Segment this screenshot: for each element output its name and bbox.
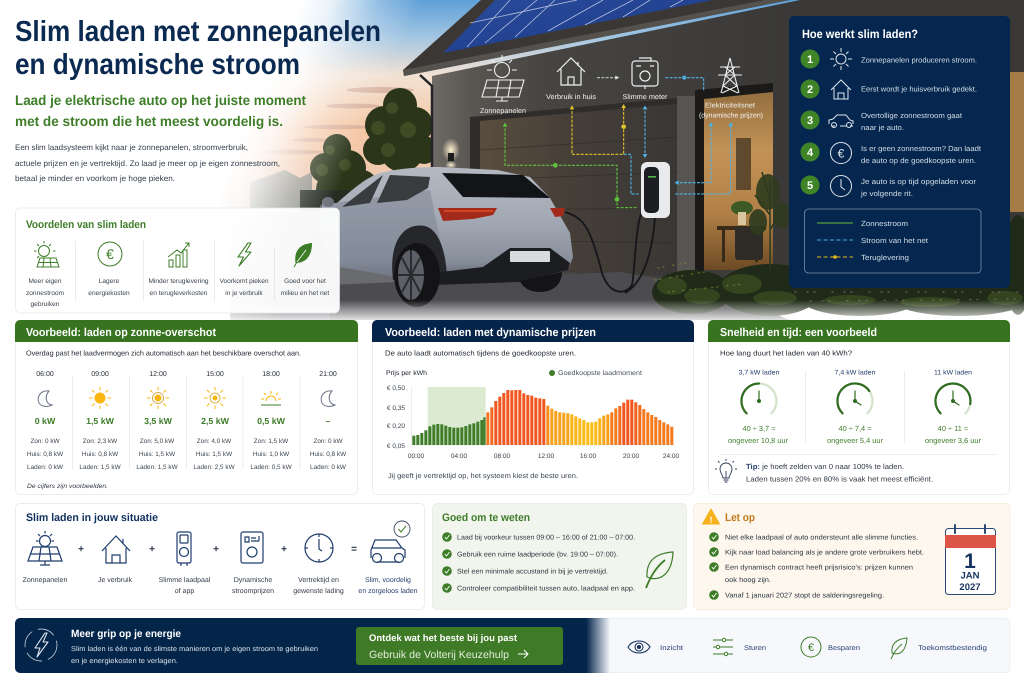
panel heading: Let op [725, 512, 755, 524]
icon: calendar 1 jan 2027 [945, 525, 996, 594]
trees [300, 88, 440, 220]
grey line from home to meter [597, 76, 619, 79]
step 5: 5 [807, 180, 813, 192]
icon: energy contract [241, 532, 263, 563]
step 4: de auto op de goedkoopste uren. [861, 156, 976, 165]
details per time: Laden: 1,5 kW [136, 464, 179, 471]
gauge 3,7 kW: 40 ÷ 3,7 = [742, 424, 776, 433]
tree highlights [316, 102, 416, 176]
checklist: Vanaf 1 januari 2027 stopt de salderingsregeling. [725, 592, 884, 600]
icon: calendar 1 jan 2027: 2027 [959, 582, 981, 593]
details per time: Zon: 4,0 kW [197, 438, 232, 445]
icon: car with check [371, 521, 410, 562]
panel: slim laden in jouw situatie [16, 504, 424, 610]
y axis labels: € 0,50 [387, 385, 405, 392]
icon: house [102, 536, 130, 563]
legend: Stroom van het net [861, 236, 928, 245]
icon labels: Vertrektijd en [298, 576, 339, 584]
dividers [72, 376, 300, 469]
checklist: Stel een minimale accustand in bij je vertrektijd. [457, 568, 608, 576]
drainpipe [420, 75, 432, 168]
icon labels: Dynamische [234, 576, 272, 584]
icon: light bulb [715, 459, 737, 482]
details per time: Laden: 0 kW [27, 464, 64, 471]
bars [412, 387, 675, 445]
wall lamp [442, 138, 460, 169]
chart caption: Jij geeft je vertrektijd op, het systeem kiest de beste uren. [388, 472, 578, 480]
wall charger [641, 162, 670, 218]
card intro: Hoe lang duurt het laden van 40 kWh? [720, 348, 852, 358]
card header [15, 320, 358, 342]
legend: Teruglevering [861, 253, 909, 262]
charging power values [35, 416, 331, 426]
icon: sliders [713, 638, 733, 656]
checklist [442, 532, 635, 593]
card intro: De auto laadt automatisch tijdens de goedkoopste uren. [385, 348, 576, 358]
call to action button: Ontdek wat het beste bij jou past [369, 633, 518, 644]
details per time: Huis: 1,5 kW [139, 451, 176, 458]
checklist: Laad bij voorkeur tussen 09:00 – 16:00 of 21:00 – 07:00. [457, 534, 635, 542]
wheel arch [392, 225, 447, 283]
icon: rising chart [168, 243, 189, 267]
banner heading: Meer grip op je energie [71, 628, 181, 640]
gauge 11 kW: 11 kW laden [934, 370, 972, 376]
icon labels: Zonnepanelen [23, 576, 67, 584]
details per time: Huis: 0,8 kW [27, 451, 64, 458]
benefit text 2: Lagere [99, 278, 120, 285]
benefit text 2: energiekosten [88, 290, 130, 297]
icon labels: Slim, voordelig [365, 576, 411, 584]
panel background [789, 16, 1010, 288]
house wall [432, 0, 1024, 290]
panel heading: Voordelen van slim laden [26, 219, 146, 231]
tip text: Laden tussen 20% en 80% is vaak het meest efficiënt. [746, 474, 933, 484]
yellow return line [572, 105, 624, 154]
gauge 3,7 kW [728, 370, 789, 445]
details per time: Huis: 0,8 kW [82, 451, 119, 458]
step 2: Eerst wordt je huisverbruik gedekt. [861, 84, 977, 94]
bumper [433, 248, 570, 285]
card heading: Snelheid en tijd: een voorbeeld [720, 327, 877, 339]
tip text [746, 462, 933, 484]
panel: let op [694, 504, 1010, 610]
gauge 7,4 kW [827, 370, 883, 445]
icon: warning triangle: ! [710, 515, 712, 525]
benefit text 3: en terugleverkosten [150, 290, 208, 297]
shrubs [652, 172, 1024, 316]
banner text: Slim laden is één van de slimste manieren om je eigen stroom te gebruiken [71, 645, 318, 653]
details per time: Zon: 1,5 kW [254, 438, 289, 445]
step 1 [800, 48, 977, 70]
panel: hoe werkt slim laden [789, 16, 1010, 288]
car rear window [442, 173, 550, 198]
number plate [510, 251, 550, 262]
title: Slim laden met zonnepanelen [15, 16, 381, 48]
hero icon: pylon [718, 58, 742, 93]
icon: leaf [891, 638, 907, 659]
panel heading: Goed om te weten [442, 512, 530, 524]
flow markers [503, 76, 733, 202]
x axis labels: 04:00 [451, 453, 468, 460]
bottom white fade [0, 300, 1024, 324]
step 2: 2 [807, 84, 813, 96]
icon: moon 06:00 [38, 391, 52, 406]
y axis labels: € 0,35 [387, 405, 405, 412]
icon: eye [628, 641, 650, 653]
hero illustration: house, car and charger at sunset [0, 0, 1024, 325]
entrance pillar [677, 96, 696, 276]
tail lights [438, 208, 565, 221]
tip text: Tip: je hoeft zelden van 0 naar 100% te laden. [746, 462, 904, 471]
panel background [16, 504, 424, 610]
card background [708, 320, 1010, 494]
benefit text 4: Voorkomt pieken [219, 278, 269, 285]
y axis labels: € 0,20 [387, 423, 405, 430]
icon: lightning circle [25, 629, 57, 661]
step 4: € [838, 146, 845, 160]
call to action button: Gebruik de Volterij Keuzehulp [369, 649, 509, 661]
car body [320, 167, 573, 285]
operator plus: + [149, 544, 155, 555]
y axis labels: € 0,05 [387, 443, 405, 450]
icon: sunset 18:00 [261, 391, 281, 405]
time labels: 21:00 [319, 371, 337, 378]
footer banner: meer grip op je energie [15, 618, 610, 673]
icon labels: gewenste lading [293, 587, 344, 595]
details per time: Laden: 1,5 kW [79, 464, 122, 471]
rear right wheel [520, 272, 562, 292]
details per time: Huis: 0,8 kW [310, 451, 347, 458]
card: laden met dynamische prijzen [372, 320, 694, 494]
label: Sturen: Sturen [744, 645, 766, 652]
card heading: Voorbeeld: laden met dynamische prijzen [385, 327, 596, 339]
step 3: Overtollige zonnestroom gaat [861, 111, 962, 120]
benefit text 3: Minder teruglevering [148, 278, 209, 285]
solar panels [443, 0, 713, 53]
panel background [694, 504, 1010, 610]
intro text: Een slim laadsysteem kijkt naar je zonnepanelen, stroomverbruik, [15, 143, 248, 152]
card: snelheid en tijd [708, 320, 1010, 494]
car [320, 167, 573, 307]
time labels [36, 371, 337, 378]
intro text: betaal je minder en voorkom je hoge pieken. [15, 174, 175, 183]
checklist: Kijk naar load balancing als je andere grote verbruikers hebt. [725, 550, 924, 556]
icon: clock [305, 534, 333, 562]
time labels: 06:00 [36, 371, 54, 378]
icon: moon 21:00 [321, 391, 335, 406]
icon: leaf [646, 552, 673, 588]
card intro: Overdag past het laadvermogen zich automatisch aan het beschikbare overschot aan. [26, 348, 301, 358]
hero label: Elektriciteitsnet [699, 102, 763, 120]
card heading: Voorbeeld: laden op zonne-overschot [26, 327, 216, 339]
panel: goed om te weten [432, 504, 686, 610]
gutter [403, 0, 790, 76]
hero label: Zonnepanelen: Zonnepanelen [480, 107, 526, 115]
step 3: 3 [807, 115, 813, 127]
icon: leaf [294, 243, 312, 267]
benefit text 5: Goed voor het [284, 278, 326, 285]
x axis labels: 20:00 [623, 453, 640, 460]
checklist: Controleer compatibiliteit tussen auto, laadpaal en app. [457, 586, 635, 592]
benefit text 1: zonnestroom [26, 290, 65, 297]
benefit text 1: gebruiken [31, 301, 60, 308]
garage door [470, 98, 677, 276]
charging cable [565, 200, 655, 293]
gauge 7,4 kW: 40 ÷ 7,4 = [838, 424, 872, 433]
rule [720, 454, 997, 456]
icon labels: of app [175, 587, 194, 595]
hero label: Elektriciteitsnet: (dynamische prijzen) [699, 112, 763, 120]
banner text: en je energiekosten te verlagen. [71, 657, 178, 665]
label: Besparen: Besparen [828, 645, 860, 652]
benefit text 4 [219, 278, 269, 297]
x axis labels: 16:00 [580, 453, 597, 460]
icon: euro [801, 637, 821, 657]
green solar line [505, 124, 638, 208]
checklist: ook hoog zijn. [725, 577, 771, 584]
icon: euro: € [106, 246, 114, 262]
x axis labels [408, 453, 680, 460]
driveway [330, 272, 790, 320]
benefit text 5: milieu en het net [281, 290, 329, 297]
sunset clouds [263, 87, 414, 154]
blue grid lines [624, 78, 731, 194]
icon labels: Slimme laadpaal [159, 576, 211, 584]
icon labels [23, 576, 418, 595]
panel background [16, 208, 340, 313]
step 5: Je auto is op tijd opgeladen voor [861, 177, 977, 186]
subtitle [15, 92, 306, 129]
benefit text 3 [148, 278, 209, 297]
operator plus: + [281, 544, 287, 555]
time labels: 15:00 [206, 371, 224, 378]
gauge 11 kW [925, 370, 981, 445]
intro text [15, 143, 280, 183]
icon: sun and panel [34, 241, 59, 267]
step 3: naar je auto. [861, 123, 904, 132]
car side windows [342, 175, 430, 207]
panel heading: Slim laden in jouw situatie [26, 512, 158, 524]
x axis labels: 24:00 [663, 453, 680, 460]
step 4: 4 [807, 147, 814, 159]
step 1: Zonnepanelen produceren stroom. [861, 56, 977, 64]
banner background [15, 618, 610, 673]
step 2 [800, 80, 977, 99]
window with warm room [695, 83, 773, 272]
icon: sun 12:00 [147, 387, 169, 409]
axis title: Prijs per kWh [386, 370, 427, 377]
icon: lightning [238, 243, 251, 266]
gauge 7,4 kW: ongeveer 5,4 uur [827, 436, 883, 445]
chart legend: Goedkoopste laadmoment [558, 370, 642, 377]
icon: warning triangle [702, 509, 720, 525]
ground [230, 212, 440, 320]
charging power values: – [326, 416, 331, 426]
icon labels: en zorgeloos laden [358, 587, 418, 595]
benefit text 5 [281, 278, 329, 297]
step 1: 1 [807, 54, 813, 66]
x axis labels: 12:00 [538, 453, 555, 460]
details per time: Zon: 2,3 kW [83, 438, 118, 445]
intro text: actuele prijzen en je vertrektijd. Zo laad je meer op je eigen zonnestroom, [15, 159, 280, 168]
charging power values: 0,5 kW [257, 416, 286, 426]
hero label: Verbruik in huis: Verbruik in huis [546, 93, 597, 101]
main wheel [394, 243, 440, 307]
checklist [709, 532, 924, 600]
time labels: 18:00 [262, 371, 280, 378]
footnote: De cijfers zijn voorbeelden. [27, 483, 108, 490]
dividers [806, 371, 904, 443]
energy flow lines [503, 76, 733, 208]
title [15, 16, 381, 81]
details per time: Laden: 2,5 kW [193, 464, 236, 471]
y axis labels [387, 385, 405, 450]
footer strip with benefits [580, 618, 1010, 672]
card header [372, 320, 694, 342]
hero label: Elektriciteitsnet: Elektriciteitsnet [705, 102, 755, 110]
icon: sun 09:00 [89, 387, 111, 409]
details per time: Zon: 0 kW [30, 438, 61, 445]
step 3 [800, 110, 962, 132]
checklist: Een dynamisch contract heeft prijsrisico's: prijzen kunnen [725, 564, 913, 572]
charging power values: 3,5 kW [144, 416, 173, 426]
distant tree line [250, 170, 312, 210]
subtitle: met de stroom die het meest voordelig is. [15, 113, 283, 129]
icon: sun 15:00 [204, 387, 226, 409]
step 4: Is er geen zonnestroom? Dan laadt [861, 144, 981, 153]
side mirror [322, 197, 334, 207]
panel heading: Hoe werkt slim laden? [802, 27, 918, 41]
title: en dynamische stroom [15, 49, 300, 81]
sky [220, 0, 1024, 235]
gauge 11 kW: ongeveer 3,6 uur [925, 436, 981, 445]
hero icon: solar panels [482, 55, 524, 101]
step 5: je volgende rit. [860, 189, 913, 198]
car side shading [320, 190, 440, 283]
left white fade [0, 0, 420, 325]
panel background [432, 504, 686, 610]
icon: solar panel [28, 531, 62, 565]
benefit text 2 [88, 278, 130, 297]
operator plus: + [213, 544, 219, 555]
icon: charge point [177, 532, 191, 566]
icon: euro [98, 242, 122, 266]
operator plus: + [78, 544, 84, 555]
card background [372, 320, 694, 494]
details per time [27, 438, 347, 471]
subtitle: Laad je elektrische auto op het juiste moment [15, 92, 306, 108]
icon: calendar 1 jan 2027: JAN [960, 570, 980, 582]
gauge 11 kW: 40 ÷ 11 = [938, 424, 968, 433]
gauge 3,7 kW: ongeveer 10,8 uur [728, 436, 789, 445]
benefit text 4: in je verbruik [225, 290, 263, 297]
checklist: Gebruik een ruime laadperiode (bv. 19:00 – 07:00). [457, 552, 618, 558]
x axis labels: 08:00 [494, 453, 511, 460]
panel: voordelen van slim laden [16, 208, 340, 313]
label: Inzicht: Inzicht [660, 644, 683, 652]
card header [708, 320, 1010, 342]
icon labels: Je verbruik [98, 576, 133, 584]
legend [804, 209, 981, 273]
details per time: Huis: 1,0 kW [253, 451, 290, 458]
benefit text 1 [26, 278, 65, 308]
checklist: Niet elke laadpaal of auto ondersteunt alle slimme functies. [725, 534, 918, 542]
charging power values: 1,5 kW [86, 416, 115, 426]
far-right window [1010, 72, 1024, 212]
banner text [71, 645, 318, 665]
charging power values: 0 kW [35, 416, 56, 426]
gauge 3,7 kW: 3,7 kW laden [738, 370, 780, 376]
dividers [76, 241, 274, 301]
details per time: Laden: 0,5 kW [250, 464, 293, 471]
card background [16, 320, 358, 494]
icon: euro: € [808, 642, 814, 654]
bar chart: price per hour [387, 385, 680, 460]
details per time: Laden: 0 kW [310, 464, 347, 471]
details per time: Zon: 5,0 kW [140, 438, 175, 445]
benefit text 1: Meer eigen [28, 278, 62, 285]
card: laden op zonne-overschot [15, 320, 358, 494]
hero label: Slimme meter: Slimme meter [622, 93, 668, 101]
x axis labels: 00:00 [408, 453, 425, 460]
label: Toekomstbestendig: Toekomstbestendig [918, 644, 987, 652]
time labels: 09:00 [91, 371, 109, 378]
icon labels: stroomprijzen [232, 587, 274, 595]
gauge 7,4 kW: 7,4 kW laden [834, 370, 876, 376]
operator equals: = [351, 544, 357, 555]
step 5 [800, 176, 977, 198]
details per time: Zon: 0 kW [313, 438, 344, 445]
call to action button [356, 627, 563, 665]
hero icon: house [557, 58, 585, 85]
step 4 [800, 142, 981, 165]
time labels: 12:00 [149, 371, 167, 378]
hero icon: smart meter [632, 58, 658, 89]
roof [403, 0, 790, 76]
charging power values: 2,5 kW [201, 416, 230, 426]
icon: calendar 1 jan 2027: 1 [964, 550, 976, 573]
details per time: Huis: 1,5 kW [196, 451, 233, 458]
legend: Zonnestroom [861, 219, 908, 228]
